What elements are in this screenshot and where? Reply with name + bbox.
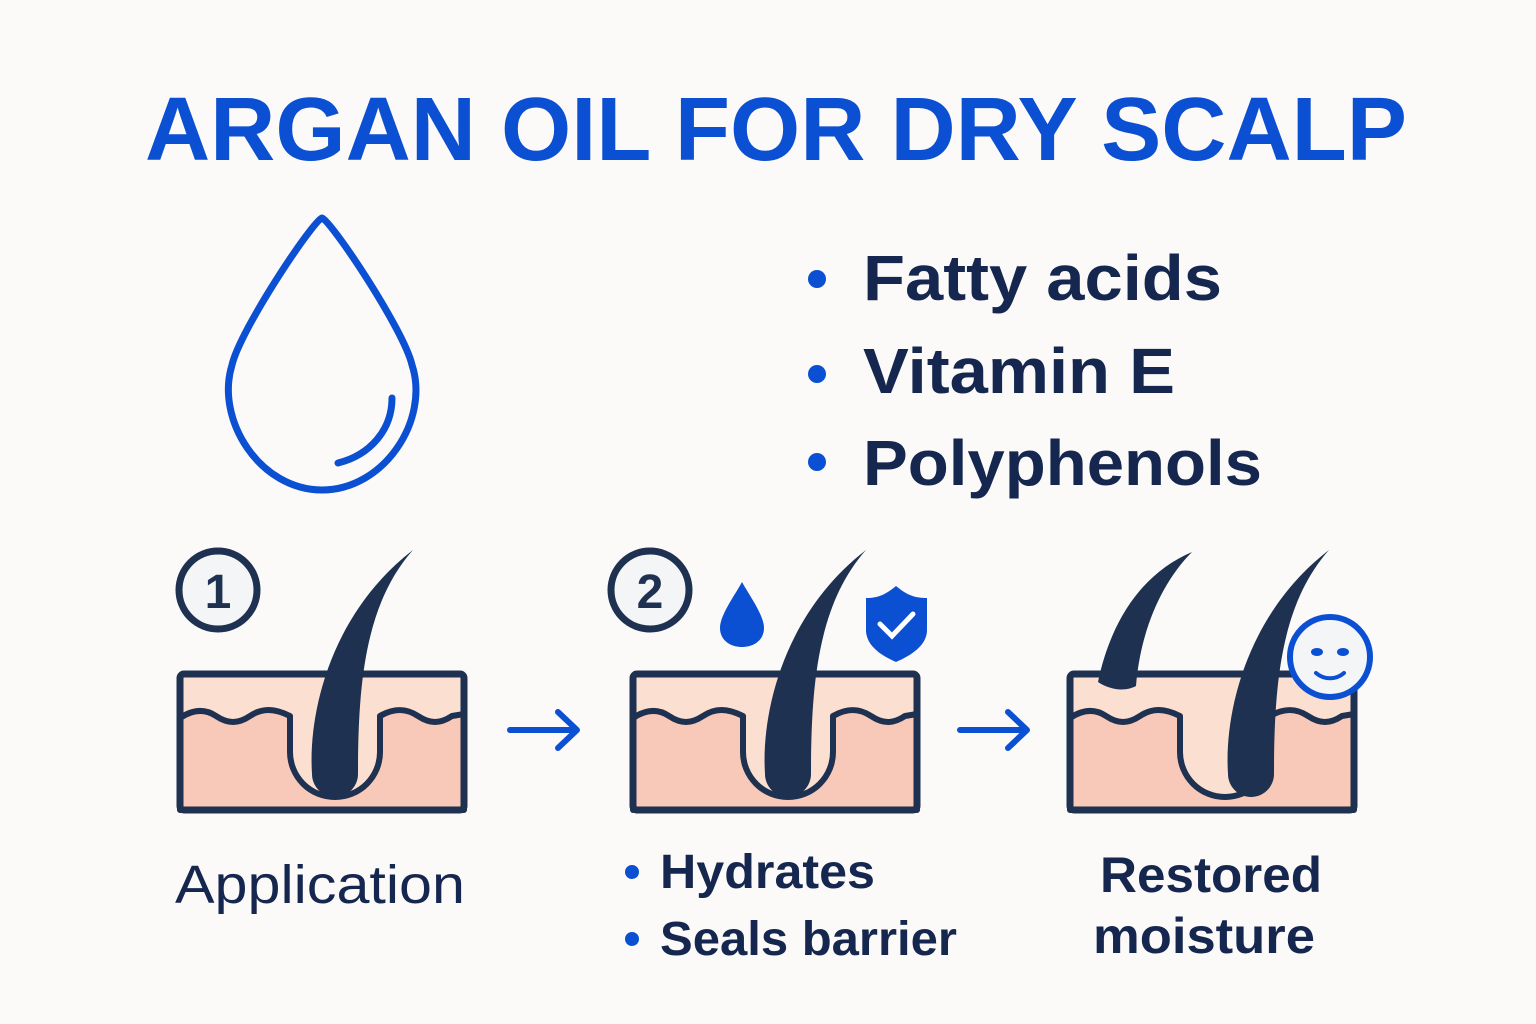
step 2: hydrates and seals xyxy=(611,550,957,966)
list: nutrients xyxy=(808,242,1262,499)
step 1: application: 1 xyxy=(205,566,231,619)
icon: smiley xyxy=(1290,617,1370,697)
step 3: restored moisture xyxy=(1070,550,1370,964)
list: nutrients: Polyphenols xyxy=(863,427,1262,499)
step 2: hydrates and seals: 2 xyxy=(637,566,663,619)
step 3: restored moisture: Restored xyxy=(1100,847,1322,903)
step 2: hydrates and seals: Hydrates xyxy=(660,846,875,899)
icon: blue drop xyxy=(720,582,764,647)
title: ARGAN OIL FOR DRY SCALP xyxy=(145,80,1407,180)
step 1: application: Application xyxy=(175,855,465,915)
step 2: hydrates and seals: Seals barrier xyxy=(660,913,957,966)
icon: shield xyxy=(866,586,927,662)
step 3: restored moisture: moisture xyxy=(1093,908,1315,964)
arrow 2 xyxy=(960,712,1027,748)
step 1: application xyxy=(175,550,465,915)
arrow 1 xyxy=(510,712,577,748)
list: nutrients: Fatty acids xyxy=(863,242,1222,314)
list: nutrients: Vitamin E xyxy=(863,335,1175,407)
icon: oil drop xyxy=(228,218,416,490)
